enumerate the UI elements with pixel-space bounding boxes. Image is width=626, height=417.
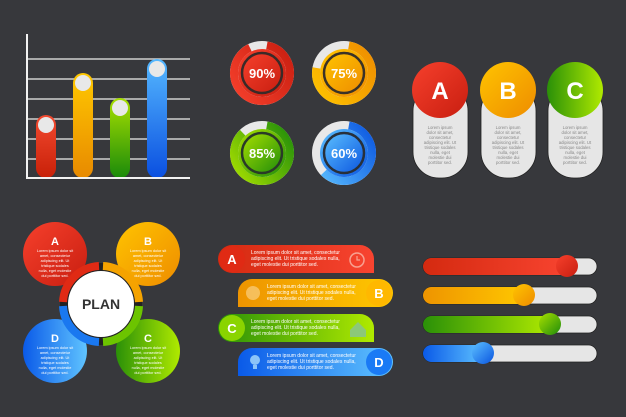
banner B: adipiscing elit. Ut tristique sodales nulla,	[267, 290, 356, 296]
plan circle C: tristique sodales	[134, 361, 162, 365]
plan circle D: adipiscing elit. Ut	[41, 356, 70, 360]
ring 90%	[230, 41, 294, 105]
banner D	[238, 348, 393, 376]
card B: B	[499, 78, 517, 105]
plan circle B	[116, 222, 180, 286]
plan circle A: Lorem ipsum dolor sit	[37, 249, 74, 253]
plan circle D: dui porttitor sed.	[41, 371, 69, 375]
ring 60%	[312, 121, 376, 185]
card A: porttitor sed.	[428, 160, 452, 165]
card A: Lorem ipsum	[428, 125, 453, 130]
card A: tristique sodales	[424, 145, 456, 150]
plan circle B: adipiscing elit. Ut	[134, 259, 163, 263]
ring 85%	[230, 121, 294, 185]
card C: dolor sit amet,	[562, 130, 588, 135]
card A: dolor sit amet,	[426, 130, 454, 135]
plan circle D	[23, 319, 87, 383]
plan circle A: amet, consectetur	[40, 254, 71, 258]
card A: molestie dui	[429, 155, 452, 160]
plan circle A: dui porttitor sed.	[41, 274, 69, 278]
bar chart	[26, 34, 190, 179]
banner C: C	[227, 321, 237, 336]
plan circle D: nulla, eget molestie	[39, 366, 71, 370]
plan circle B: amet, consectetur	[133, 254, 164, 258]
banner C: Lorem ipsum dolor sit amet, consectetur	[251, 319, 340, 325]
banner D: D	[374, 355, 384, 370]
card C: Lorem ipsum	[563, 125, 588, 130]
ring 60%: 60%	[331, 146, 357, 161]
plan circle B: dui porttitor sed.	[134, 274, 162, 278]
card B: nulla, eget	[498, 150, 519, 155]
bar red	[36, 115, 56, 178]
banner A	[218, 245, 374, 273]
bar blue	[147, 59, 167, 178]
banner A: A	[227, 252, 237, 267]
banner B: B	[374, 286, 384, 301]
banner A: adipiscing elit. Ut tristique sodales nulla,	[251, 256, 340, 262]
card A: adipiscing elit. Ut	[424, 140, 457, 145]
slider blue	[423, 342, 597, 364]
plan circle D: tristique sodales	[41, 361, 69, 365]
plan circle C: adipiscing elit. Ut	[134, 356, 163, 360]
plan circle D: D	[51, 333, 59, 345]
card B	[480, 62, 536, 178]
card C: nulla, eget	[565, 150, 586, 155]
banner B	[238, 279, 393, 307]
plan circle C: Lorem ipsum dolor sit	[130, 346, 167, 350]
ring 90%: 90%	[249, 66, 275, 81]
card C: consectetur	[564, 135, 587, 140]
banner D: Lorem ipsum dolor sit amet, consectetur	[267, 353, 356, 359]
slider red	[423, 255, 597, 277]
plan circle A	[23, 222, 87, 286]
plan circle C: nulla, eget molestie	[132, 366, 164, 370]
banner C: adipiscing elit. Ut tristique sodales nulla,	[251, 325, 340, 331]
card B: tristique sodales	[492, 145, 524, 150]
PLAN label: PLAN	[82, 296, 120, 312]
card B: porttitor sed.	[496, 160, 520, 165]
slider orange	[423, 284, 597, 306]
card B: molestie dui	[497, 155, 520, 160]
plan circle D: amet, consectetur	[40, 351, 71, 355]
plan circle A: nulla, eget molestie	[39, 269, 71, 273]
banner B: Lorem ipsum dolor sit amet, consectetur	[267, 284, 356, 290]
card C: C	[566, 78, 584, 105]
plan circle B: tristique sodales	[134, 264, 162, 268]
plan circle C: amet, consectetur	[133, 351, 164, 355]
card C: molestie dui	[564, 155, 587, 160]
slider green	[423, 313, 597, 335]
card B: adipiscing elit. Ut	[492, 140, 525, 145]
plan circle C: dui porttitor sed.	[134, 371, 162, 375]
plan circle A: A	[51, 236, 59, 248]
card A: A	[431, 78, 449, 105]
banner B: eget molestie dui porttitor sed.	[267, 296, 334, 302]
banner A: Lorem ipsum dolor sit amet, consectetur	[251, 250, 340, 256]
plan circle B: B	[144, 236, 152, 248]
card B: consectetur	[497, 135, 520, 140]
plan diagram	[23, 222, 180, 383]
banner D: adipiscing elit. Ut tristique sodales nulla,	[267, 359, 356, 365]
banner D: eget molestie dui porttitor sed.	[267, 365, 334, 371]
card A: consectetur	[429, 135, 452, 140]
card C	[547, 62, 603, 178]
banner A: eget molestie dui porttitor sed.	[251, 262, 318, 268]
card C: porttitor sed.	[563, 160, 587, 165]
card C: adipiscing elit. Ut	[559, 140, 592, 145]
bar orange	[73, 73, 93, 178]
card C: tristique sodales	[559, 145, 591, 150]
ring 75%: 75%	[331, 66, 357, 81]
plan circle C: C	[144, 333, 152, 345]
plan circle B: nulla, eget molestie	[132, 269, 164, 273]
plan circle C	[116, 319, 180, 383]
bar green	[110, 98, 130, 178]
plan circle B: Lorem ipsum dolor sit	[130, 249, 167, 253]
ring 85%: 85%	[249, 146, 275, 161]
card B: dolor sit amet,	[494, 130, 522, 135]
ring 75%	[312, 41, 376, 105]
card A: nulla, eget	[430, 150, 451, 155]
banner C	[218, 314, 374, 342]
card B: Lorem ipsum	[496, 125, 521, 130]
plan circle A: tristique sodales	[41, 264, 69, 268]
card A	[412, 62, 468, 178]
plan circle A: adipiscing elit. Ut	[41, 259, 70, 263]
banner C: eget molestie dui porttitor sed.	[251, 331, 318, 337]
plan circle D: Lorem ipsum dolor sit	[37, 346, 74, 350]
